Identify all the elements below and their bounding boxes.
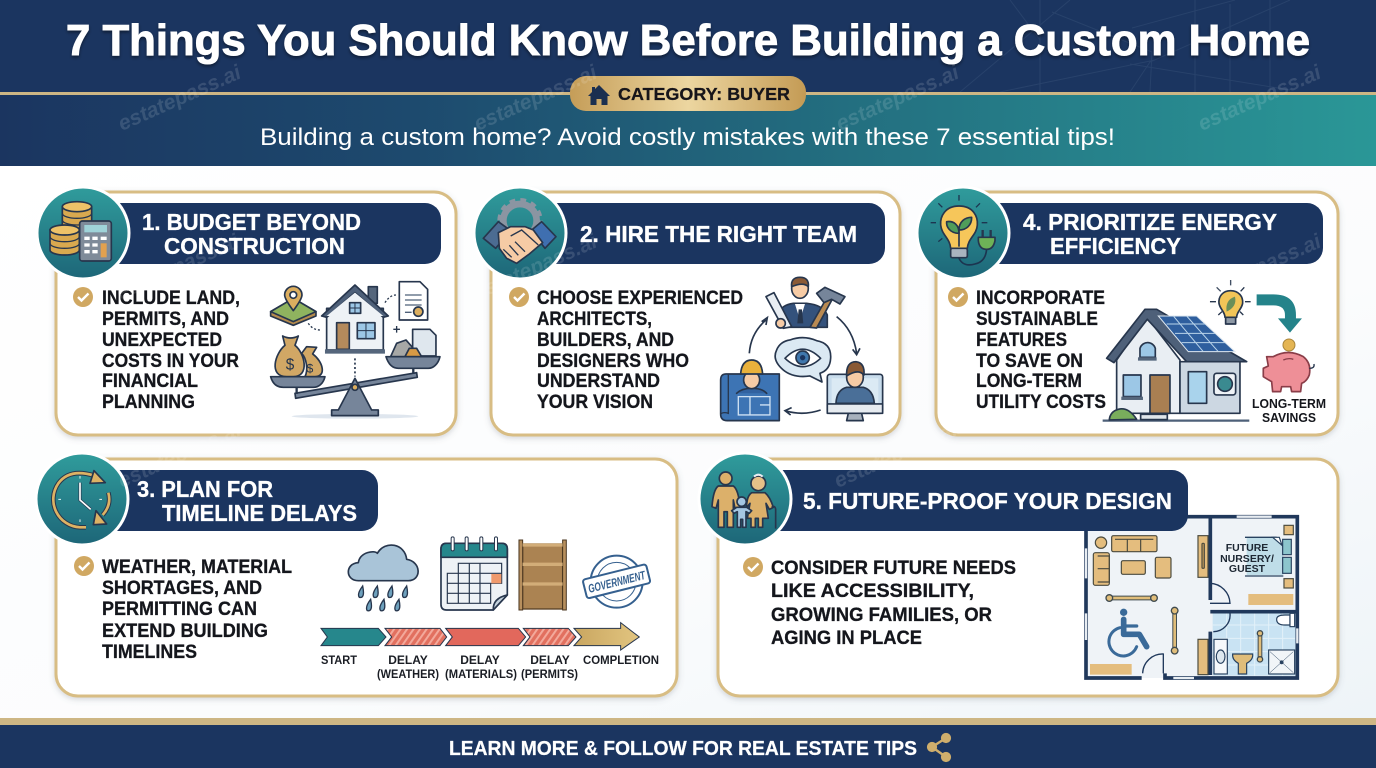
body text bbox=[102, 557, 292, 663]
heading text bbox=[137, 476, 357, 526]
land plot with pin bbox=[271, 286, 320, 330]
heading bar bbox=[775, 470, 1188, 531]
heading text: 3. PLAN FOR bbox=[137, 476, 273, 502]
faint watermarks over card headings: estatepass.ai bbox=[115, 417, 246, 493]
heading bar bbox=[990, 203, 1323, 264]
cycle arrows bbox=[749, 317, 860, 415]
money bags: $ bbox=[286, 356, 295, 373]
panel: 2 hire the right team bbox=[474, 187, 900, 435]
windows bbox=[1086, 517, 1297, 678]
bathroom fixtures bbox=[1214, 613, 1295, 674]
card frame bbox=[718, 459, 1338, 696]
body text: LIKE ACCESSIBILITY, bbox=[771, 581, 974, 602]
doors bbox=[1143, 583, 1230, 673]
body text: SUSTAINABLE bbox=[976, 309, 1098, 330]
calendar bbox=[441, 538, 507, 610]
icon: family with cane bbox=[699, 453, 791, 545]
body text: TIMELINES bbox=[102, 642, 197, 663]
timeline arrows bbox=[321, 623, 639, 650]
floor plan room label bbox=[1220, 542, 1274, 575]
solar house bbox=[1103, 309, 1249, 421]
body text: FINANCIAL bbox=[102, 371, 198, 392]
government stamp: GOVERNMENT bbox=[587, 568, 648, 596]
timeline labels: START bbox=[321, 653, 358, 667]
body text: SHORTAGES, AND bbox=[102, 578, 262, 599]
body text: YOUR VISION bbox=[537, 392, 653, 413]
bathroom tile floor bbox=[1213, 612, 1295, 676]
card frame bbox=[56, 192, 456, 435]
floor plan room label: GUEST bbox=[1229, 563, 1266, 575]
illustration: house on balance scale bbox=[271, 282, 440, 419]
category pill bbox=[570, 76, 806, 111]
heading text: 4. PRIORITIZE ENERGY bbox=[1023, 209, 1277, 235]
floor plan room label: FUTURE bbox=[1226, 542, 1268, 554]
savings label: LONG-TERM bbox=[1252, 396, 1326, 411]
body text: BUILDERS, AND bbox=[537, 330, 674, 351]
faint watermarks over card headings bbox=[113, 229, 1326, 493]
material shelf bbox=[519, 540, 566, 610]
body text: FEATURES bbox=[976, 330, 1067, 351]
floor plan bbox=[1086, 517, 1297, 678]
icon: wheelchair symbol bbox=[1109, 609, 1147, 656]
grab bars bbox=[1106, 595, 1263, 662]
body text: UNDERSTAND bbox=[537, 371, 660, 392]
floor plan room label: NURSERY/ bbox=[1220, 553, 1274, 565]
body text: LONG-TERM bbox=[976, 371, 1082, 392]
timeline labels: DELAY bbox=[388, 653, 428, 667]
body text: INCLUDE LAND, bbox=[102, 288, 240, 309]
heading bar bbox=[110, 203, 441, 264]
watermarks: estatepass.ai bbox=[115, 60, 246, 136]
check icon bbox=[948, 287, 968, 307]
watermarks bbox=[115, 60, 1326, 136]
icon: house bbox=[588, 85, 610, 105]
body text bbox=[976, 288, 1106, 413]
gold divider line bbox=[0, 92, 1376, 95]
watermarks: estatepass.ai bbox=[471, 60, 602, 136]
body text: PERMITTING CAN bbox=[102, 599, 257, 620]
timeline labels: DELAY bbox=[460, 653, 500, 667]
footer text: LEARN MORE & FOLLOW FOR REAL ESTATE TIPS bbox=[449, 738, 917, 760]
certificate document bbox=[385, 282, 428, 333]
faint watermarks over card headings: estatepass.ai bbox=[113, 229, 244, 305]
header banner bbox=[0, 0, 1376, 166]
heading text: CONSTRUCTION bbox=[164, 233, 345, 259]
card frame bbox=[936, 192, 1338, 435]
body text: TO SAVE ON bbox=[976, 351, 1083, 372]
panel: 5 future-proof your design bbox=[699, 453, 1338, 696]
body text: ARCHITECTS, bbox=[537, 309, 652, 330]
balance scale bbox=[271, 357, 440, 419]
page background bbox=[0, 166, 1376, 718]
body text: GROWING FAMILIES, OR bbox=[771, 605, 992, 626]
savings label bbox=[1252, 396, 1326, 425]
heading bar bbox=[110, 470, 378, 531]
card frame bbox=[56, 459, 677, 696]
builder on blueprint bbox=[721, 360, 779, 421]
architect with hammer bbox=[766, 277, 845, 328]
panel: 1 budget beyond construction bbox=[37, 187, 456, 435]
walls bbox=[1086, 517, 1297, 678]
check icon bbox=[509, 287, 529, 307]
government stamp bbox=[583, 556, 651, 608]
nursery rug bbox=[1247, 537, 1283, 575]
faint watermarks over card headings: estatepass.ai bbox=[471, 229, 602, 305]
timeline labels: (PERMITS) bbox=[521, 667, 578, 681]
body text bbox=[537, 288, 743, 413]
body text: COSTS IN YOUR bbox=[102, 351, 239, 372]
body text bbox=[771, 558, 1016, 649]
savings arrow bbox=[1257, 294, 1302, 333]
heading bar bbox=[545, 203, 885, 264]
money bags bbox=[275, 336, 322, 377]
check icon bbox=[74, 556, 94, 576]
body text: AGING IN PLACE bbox=[771, 628, 922, 649]
heading text: EFFICIENCY bbox=[1050, 233, 1181, 259]
panel: 3 plan for timeline delays bbox=[36, 453, 677, 696]
illustration: solar house and savings bbox=[1103, 280, 1314, 421]
gold and papers on right pan bbox=[391, 329, 436, 357]
footer navy band bbox=[0, 725, 1376, 768]
savings label: SAVINGS bbox=[1262, 410, 1316, 425]
timeline labels: COMPLETION bbox=[583, 653, 659, 667]
category label: CATEGORY: BUYER bbox=[618, 84, 790, 104]
heading text: 5. FUTURE-PROOF YOUR DESIGN bbox=[803, 488, 1172, 514]
body text: CONSIDER FUTURE NEEDS bbox=[771, 558, 1016, 579]
illustration: team cycle around vision bbox=[721, 277, 883, 421]
heading text: TIMELINE DELAYS bbox=[162, 500, 357, 526]
footer bar bbox=[0, 718, 1376, 768]
check icon bbox=[73, 287, 93, 307]
timeline labels: (MATERIALS) bbox=[445, 667, 517, 681]
crib bbox=[1273, 537, 1291, 573]
title: 7 Things You Should Know Before Building a Custom Home bbox=[66, 16, 1310, 65]
money bags: $ bbox=[307, 362, 314, 376]
heading text: 1. BUDGET BEYOND bbox=[142, 209, 361, 235]
icon: handshake and gear bbox=[474, 187, 566, 279]
icon: coins and calculator bbox=[37, 187, 129, 279]
body text: CHOOSE EXPERIENCED bbox=[537, 288, 743, 309]
rain cloud bbox=[348, 545, 418, 611]
heading text: 2. HIRE THE RIGHT TEAM bbox=[580, 221, 857, 247]
timeline labels: (WEATHER) bbox=[377, 667, 439, 681]
body text: EXTEND BUILDING bbox=[102, 621, 268, 642]
subtitle: Building a custom home? Avoid costly mistakes with these 7 essential tips! bbox=[260, 124, 1115, 151]
body text: INCORPORATE bbox=[976, 288, 1105, 309]
illustration: delay causes and timeline bbox=[321, 538, 651, 650]
vision speech bubble bbox=[775, 338, 831, 382]
eco bulb with rays bbox=[1210, 280, 1251, 324]
body text: PLANNING bbox=[102, 392, 195, 413]
body text: DESIGNERS WHO bbox=[537, 351, 689, 372]
icon: light bulb with plug bbox=[917, 187, 1009, 279]
watermarks: estatepass.ai bbox=[1195, 60, 1326, 136]
body text bbox=[102, 288, 240, 413]
timeline labels: DELAY bbox=[530, 653, 570, 667]
body text: UNEXPECTED bbox=[102, 330, 222, 351]
heading text bbox=[1023, 209, 1277, 259]
piggy bank with coin bbox=[1263, 339, 1314, 392]
header teal gradient band bbox=[0, 94, 1376, 166]
faint watermarks over card headings: estatepass.ai bbox=[1195, 229, 1326, 305]
icon: share bbox=[927, 733, 951, 762]
header navy area bbox=[0, 0, 1376, 94]
house bbox=[322, 285, 388, 354]
body text: PERMITS, AND bbox=[102, 309, 229, 330]
living room furniture bbox=[1090, 525, 1293, 675]
timeline labels bbox=[321, 653, 659, 681]
footer gold line bbox=[0, 718, 1376, 725]
watermarks: estatepass.ai bbox=[833, 60, 964, 136]
icon: clock with arrows bbox=[36, 453, 128, 545]
heading text bbox=[142, 209, 361, 259]
body text: UTILITY COSTS bbox=[976, 392, 1106, 413]
body text: WEATHER, MATERIAL bbox=[102, 557, 292, 578]
panel: 4 prioritize energy efficiency bbox=[917, 187, 1338, 435]
card frame bbox=[491, 192, 900, 435]
blueprint house line art bbox=[960, 0, 1290, 92]
faint watermarks over card headings: estatepass.ai bbox=[831, 417, 962, 493]
check icon bbox=[743, 557, 763, 577]
designer on monitor bbox=[827, 362, 883, 421]
